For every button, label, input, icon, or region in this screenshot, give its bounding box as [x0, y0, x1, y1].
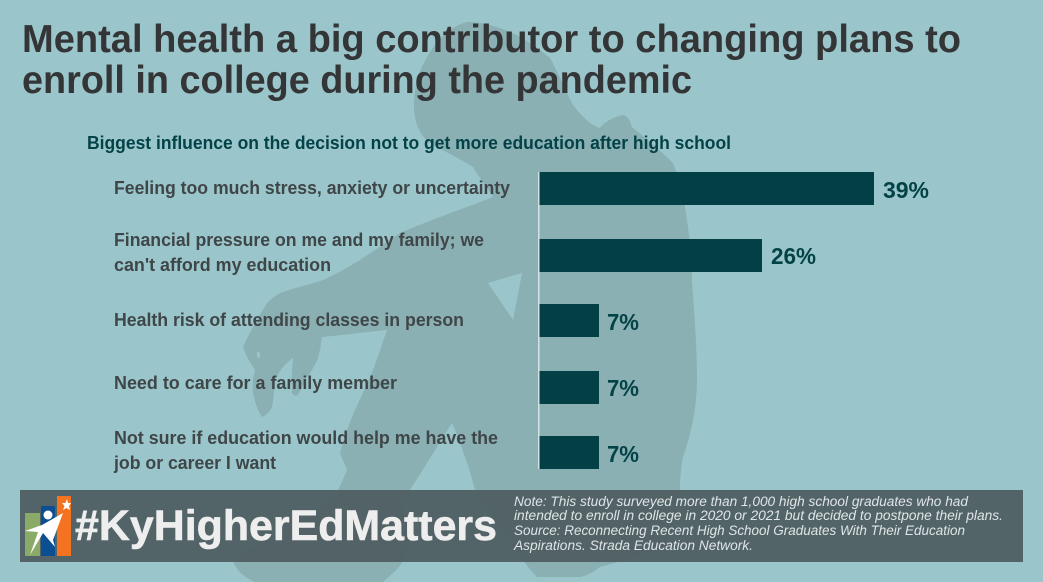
- note and source: [513, 494, 1003, 553]
- value labels: 7%: [607, 375, 639, 401]
- category labels: Health risk of attending classes in person: [114, 310, 464, 330]
- hashtag: #KyHigherEdMatters: [75, 502, 497, 550]
- category labels: [113, 178, 510, 473]
- category labels: Financial pressure on me and my family; we: [114, 230, 484, 250]
- category labels: job or career I want: [113, 453, 276, 473]
- value labels: [607, 177, 929, 467]
- footer band: [20, 490, 1023, 562]
- value labels: 39%: [883, 177, 929, 203]
- note and source: Source: Reconnecting Recent High School Graduates With Their Education: [514, 523, 965, 538]
- category labels: can't afford my education: [114, 255, 331, 275]
- note and source: Note: This study surveyed more than 1,000 high school graduates who had: [514, 494, 968, 509]
- category labels: Not sure if education would help me have the: [114, 428, 498, 448]
- value labels: 7%: [607, 309, 639, 335]
- title: enroll in college during the pandemic: [22, 59, 692, 102]
- background silhouette: seated person: [233, 22, 697, 582]
- bars: [539, 172, 874, 469]
- bar chart: [113, 172, 929, 473]
- category labels: Feeling too much stress, anxiety or uncertainty: [114, 178, 510, 198]
- note and source: Aspirations. Strada Education Network.: [513, 538, 753, 553]
- value labels: 26%: [771, 243, 816, 269]
- title: [22, 18, 961, 102]
- logo icon: [25, 496, 71, 556]
- category labels: Need to care for a family member: [114, 373, 397, 393]
- note and source: intended to enroll in college in 2020 or 2021 but decided to postpone their plans.: [514, 508, 1003, 523]
- chart subtitle: Biggest influence on the decision not to get more education after high school: [87, 133, 731, 153]
- value labels: 7%: [607, 441, 639, 467]
- title: Mental health a big contributor to changing plans to: [22, 18, 961, 61]
